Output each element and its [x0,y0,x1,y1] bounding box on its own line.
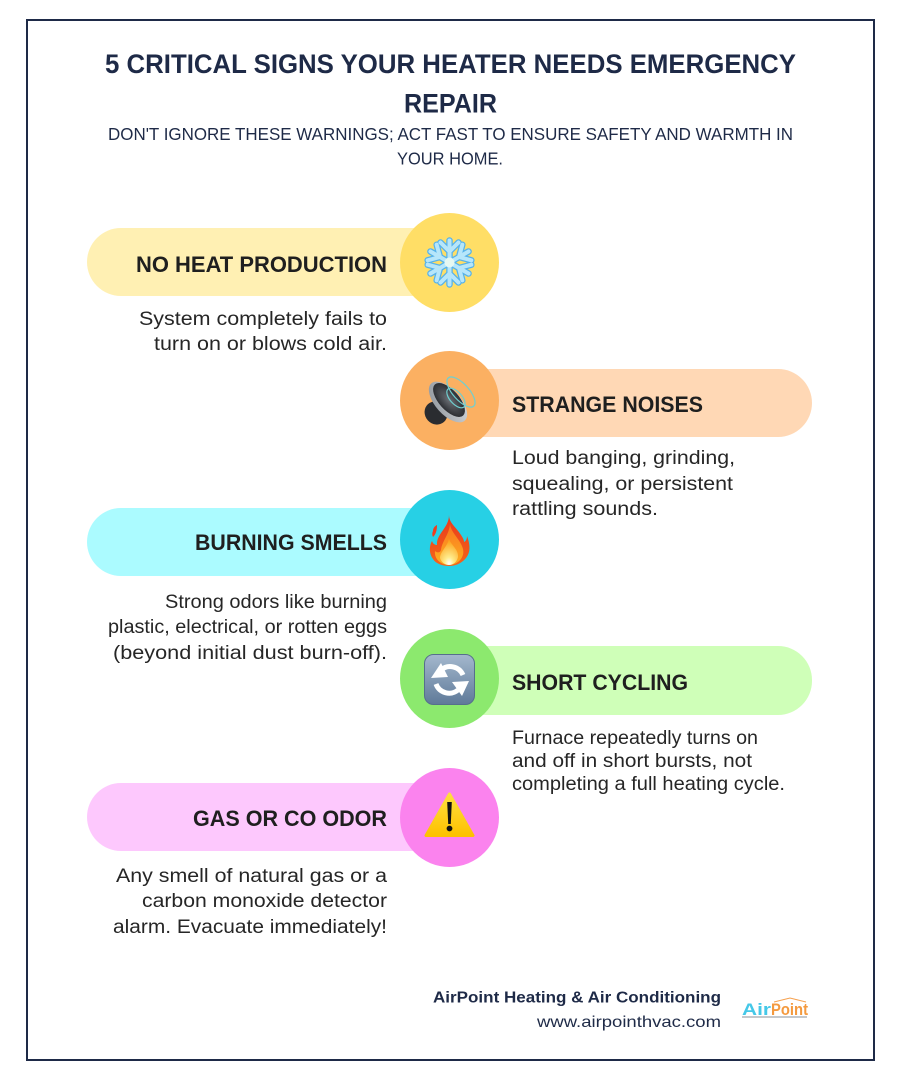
footer: company name and website: www.airpointhvac.com [536,1014,721,1031]
icon: snowflake [426,240,473,284]
description: gas or co odor [113,866,388,938]
footer: company name and website: AirPoint Heating & Air Conditioning [433,990,721,1006]
logo: AirPoint [742,998,808,1019]
icon circle: green [400,629,499,728]
heading: gas or co odor: GAS OR CO ODOR [193,806,387,831]
icon circle: yellow [400,213,499,312]
panel: no heat production [87,213,499,355]
panel: gas or co odor [87,768,499,938]
description: short cycling: Furnace repeatedly turns on [512,728,758,749]
heading: burning smells: BURNING SMELLS [195,530,387,555]
heading pill: gas or co odor [87,783,467,851]
description: gas or co odor: Any smell of natural gas or a [116,866,387,887]
heading pill: short cycling [432,646,812,715]
icon: warning triangle [426,794,473,836]
icon: speaker [420,373,480,429]
description: burning smells: (beyond initial dust burn-off). [113,643,387,664]
logo: AirPoint: Point [771,1000,808,1019]
description: short cycling [512,728,785,795]
title [105,49,796,118]
description: strange noises: rattling sounds. [512,499,658,520]
description: gas or co odor: alarm. Evacuate immediately! [113,917,387,938]
heading: no heat production: NO HEAT PRODUCTION [136,252,387,277]
heading: strange noises: STRANGE NOISES [512,392,703,417]
icon circle: pink [400,768,499,867]
heading pill: strange noises [432,369,812,437]
subtitle: DON'T IGNORE THESE WARNINGS; ACT FAST TO ENSURE SAFETY AND WARMTH IN [108,124,793,144]
logo: AirPoint: Air [742,1000,771,1019]
title: REPAIR [404,88,497,118]
description: no heat production: System completely fails to [139,309,387,330]
description: strange noises [512,448,735,520]
icon: fire [430,515,470,566]
description: short cycling: completing a full heating cycle. [512,774,785,795]
panel: burning smells [87,490,499,664]
heading: short cycling: SHORT CYCLING [512,670,688,695]
icon circle: orange [400,351,499,450]
description: strange noises: squealing, or persistent [512,474,734,495]
description: burning smells [108,592,387,664]
panel: short cycling [400,629,812,795]
description: burning smells: Strong odors like burning [165,592,387,613]
description: short cycling: and off in short bursts, not [512,751,753,772]
subtitle: YOUR HOME. [397,148,503,168]
heading pill: burning smells [87,508,467,576]
footer: company name and website [433,990,721,1031]
icon circle: cyan [400,490,499,589]
title: 5 CRITICAL SIGNS YOUR HEATER NEEDS EMERGENCY [105,49,796,79]
subtitle [108,124,793,168]
description: burning smells: plastic, electrical, or rotten eggs [108,617,387,638]
heading pill: no heat production [87,228,467,296]
description: no heat production [139,309,387,355]
description: gas or co odor: carbon monoxide detector [142,891,388,912]
description: no heat production: turn on or blows cold air. [154,334,387,355]
panel: strange noises [400,351,812,520]
description: strange noises: Loud banging, grinding, [512,448,735,469]
icon: cycle arrows [424,654,474,704]
